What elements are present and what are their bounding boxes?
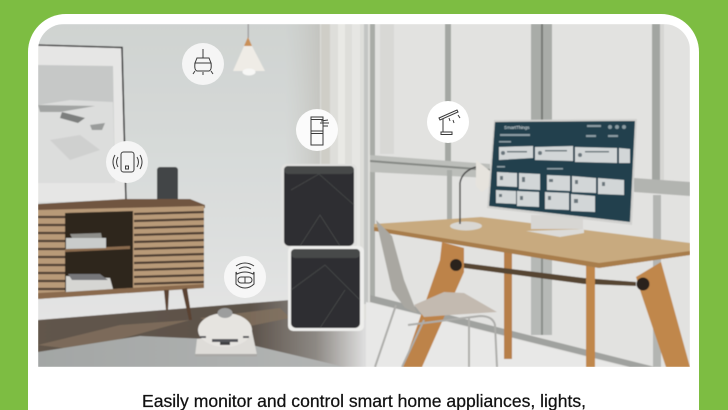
wall shadow near curtain bbox=[300, 24, 320, 164]
icon: robot vacuum bbox=[224, 256, 266, 298]
chair bbox=[375, 220, 497, 367]
screen cards bbox=[496, 146, 630, 212]
room photo bbox=[38, 24, 690, 367]
air purifier stack bbox=[281, 164, 364, 331]
SmartThings header: SmartThings bbox=[504, 125, 530, 130]
rug bbox=[38, 336, 345, 367]
cabinet legs bbox=[164, 290, 169, 310]
monitor bbox=[487, 119, 637, 237]
books bbox=[66, 238, 106, 249]
wooden cabinet bbox=[38, 199, 205, 320]
curtain bbox=[320, 24, 330, 164]
robot vacuum bbox=[195, 308, 257, 356]
icon: desk lamp bbox=[427, 101, 469, 143]
icon: air purifier bbox=[296, 109, 338, 151]
icon: smart speaker bbox=[106, 141, 148, 183]
slats bbox=[38, 212, 204, 289]
desk lamp bbox=[450, 162, 490, 232]
wood floor bbox=[38, 300, 366, 367]
pendant lamp bbox=[233, 24, 265, 76]
desk bbox=[374, 217, 690, 367]
smart speaker bbox=[157, 167, 178, 204]
window frames bbox=[364, 24, 690, 367]
icon: pendant light bbox=[182, 43, 224, 85]
back wall bbox=[39, 24, 312, 200]
framed picture bbox=[38, 44, 127, 205]
